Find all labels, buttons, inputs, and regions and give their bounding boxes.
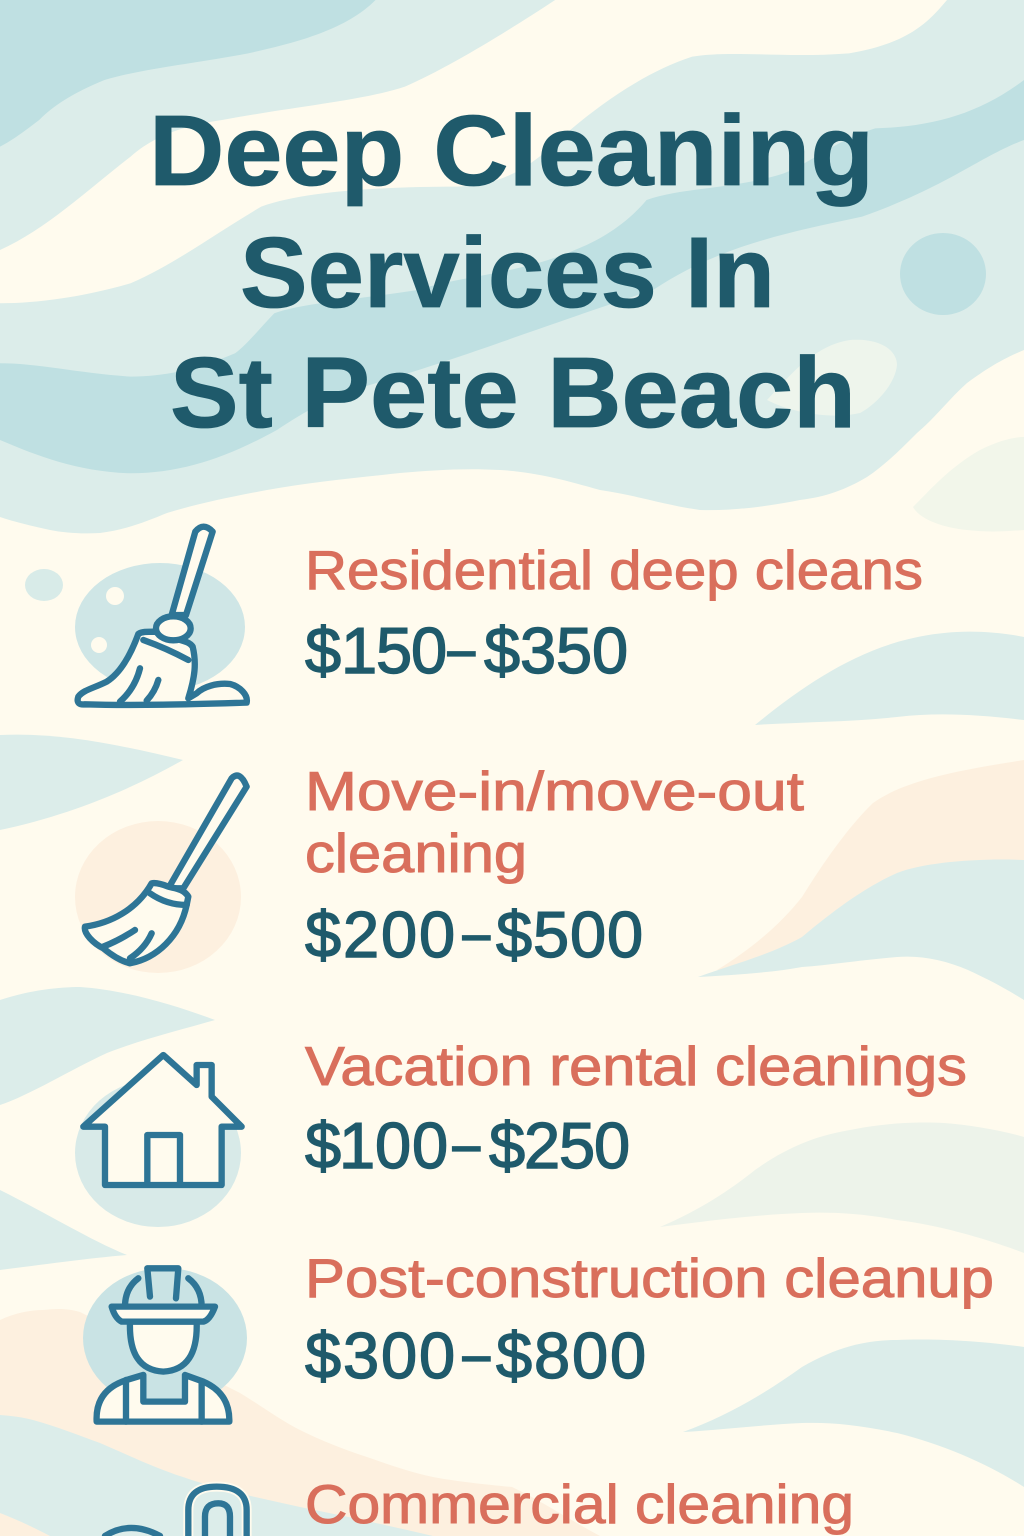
price: – <box>448 624 475 677</box>
price: $250 <box>489 1109 630 1182</box>
title <box>149 95 874 449</box>
label: Residential deep cleans <box>305 539 923 601</box>
background: lower waves <box>0 632 1024 1536</box>
service 4: post-construction cleanup <box>83 1247 994 1422</box>
icon: mop with bubbles <box>25 527 247 705</box>
price: – <box>453 1119 480 1172</box>
price: – <box>463 1329 490 1382</box>
price: $150 <box>305 614 447 687</box>
price: $200 <box>305 898 455 971</box>
label: Commercial cleaning <box>305 1473 854 1535</box>
icon: broom <box>75 776 247 973</box>
title: Services In <box>240 217 775 329</box>
label: Vacation rental cleanings <box>305 1035 967 1097</box>
label: Move-in/move-out <box>305 760 804 822</box>
label <box>305 760 804 884</box>
price: $350 <box>484 614 628 687</box>
label: Post-construction cleanup <box>305 1247 994 1309</box>
service 5: commercial cleaning <box>105 1473 854 1536</box>
icon: construction worker <box>83 1268 247 1422</box>
service 3: vacation rental cleanings <box>75 1035 967 1227</box>
price: $100 <box>305 1109 448 1182</box>
title: St Pete Beach <box>170 337 856 449</box>
price: $500 <box>496 898 643 971</box>
price: $800 <box>496 1319 646 1392</box>
icon: partial commercial cleaning tool <box>105 1487 247 1536</box>
service 2: move-in/move-out cleaning <box>75 760 804 973</box>
price: – <box>463 908 490 961</box>
background: top water waves <box>0 0 1024 533</box>
service 1: residential deep cleans <box>25 527 923 705</box>
label: cleaning <box>305 822 527 884</box>
icon: house <box>75 1055 242 1227</box>
title: Deep Cleaning <box>149 95 874 207</box>
price: $300 <box>305 1319 455 1392</box>
